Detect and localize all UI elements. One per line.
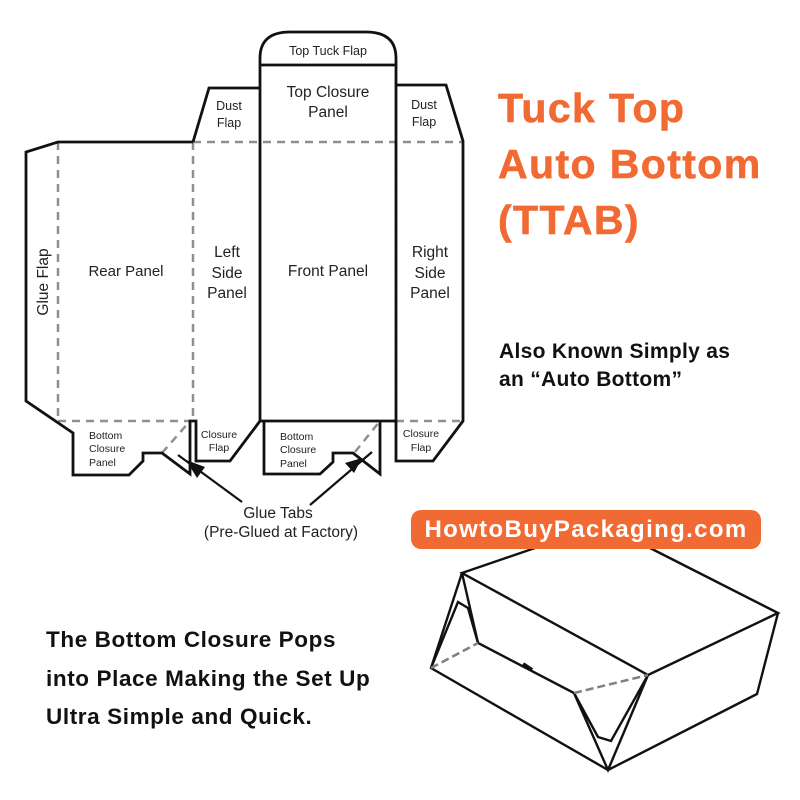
flap labels: Panel	[280, 458, 307, 470]
panel labels: Left	[214, 244, 241, 261]
panel labels: Panel	[410, 285, 450, 302]
carton outline	[26, 32, 463, 475]
website badge	[411, 510, 761, 549]
flap labels: Bottom	[89, 430, 123, 442]
fold lines	[58, 141, 463, 453]
glue tabs label	[204, 505, 358, 541]
flap labels: Panel	[89, 457, 116, 469]
panel labels: Flap	[217, 116, 241, 130]
panel labels: Side	[414, 265, 446, 282]
subtitle	[499, 340, 730, 391]
title: (TTAB)	[498, 197, 640, 243]
panel labels: Right	[412, 244, 449, 261]
subtitle: Also Known Simply as	[499, 340, 730, 363]
panel labels: Top Tuck Flap	[289, 44, 367, 58]
glue tabs label: Glue Tabs	[243, 505, 313, 522]
panel labels: Dust	[216, 99, 242, 113]
description text: into Place Making the Set Up	[46, 666, 370, 690]
panel labels: Top Closure	[287, 84, 369, 101]
panel labels: Front Panel	[288, 263, 368, 280]
title: Tuck Top	[498, 85, 685, 131]
arrow: right glue tab	[310, 452, 372, 505]
description text	[46, 627, 370, 729]
flap labels	[89, 428, 439, 470]
flap labels: Flap	[209, 442, 229, 454]
flap labels: Flap	[411, 442, 431, 454]
glue tabs label: (Pre-Glued at Factory)	[204, 524, 358, 541]
panel labels: Flap	[412, 115, 436, 129]
panel labels: Dust	[411, 98, 437, 112]
title: Auto Bottom	[498, 141, 762, 187]
flap labels: Closure	[89, 443, 125, 455]
description text: The Bottom Closure Pops	[46, 627, 336, 652]
subtitle: an “Auto Bottom”	[499, 368, 682, 391]
panel labels	[35, 44, 450, 316]
flap labels: Closure	[403, 428, 439, 440]
flap labels: Closure	[201, 429, 237, 441]
panel labels: Panel	[207, 285, 247, 302]
title	[498, 85, 762, 243]
flap labels: Closure	[280, 444, 316, 456]
panel labels: Panel	[308, 104, 348, 121]
website badge: HowtoBuyPackaging.com	[424, 516, 748, 543]
panel labels: Side	[211, 265, 243, 282]
flap labels: Bottom	[280, 431, 314, 443]
arrow: left glue tab	[178, 455, 242, 502]
description text: Ultra Simple and Quick.	[46, 704, 312, 729]
panel labels: Rear Panel	[88, 263, 164, 280]
assembled box illustration	[431, 548, 778, 770]
panel labels: Glue Flap	[35, 248, 52, 316]
